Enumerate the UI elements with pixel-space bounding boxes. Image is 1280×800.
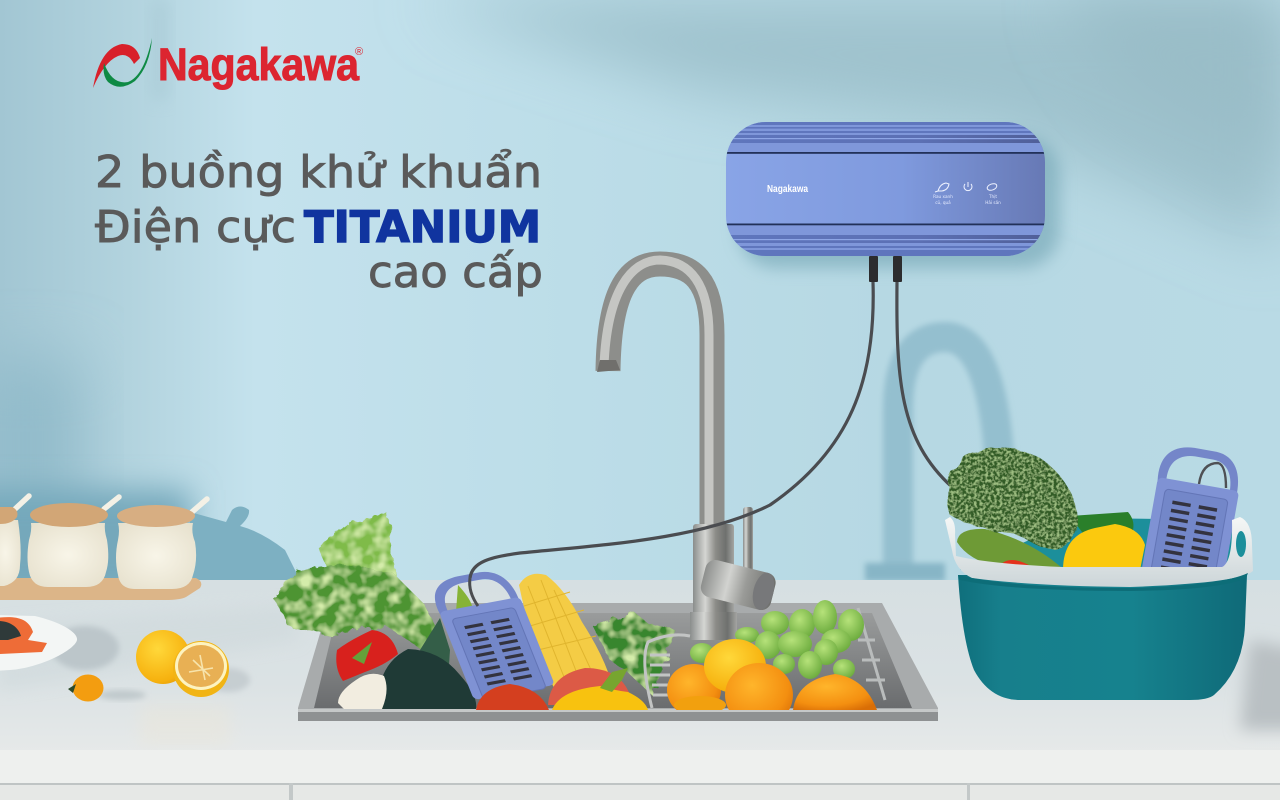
bowl back wall [960,518,1250,570]
headline line 3: cao cấp [368,247,543,298]
jar right [116,505,196,589]
icon: power [964,182,972,191]
vegetables in sink [275,514,885,727]
grater in sink [434,572,554,700]
headline line 1: 2 buồng khử khuẩn [95,147,542,198]
small tomato [68,674,146,702]
faucet body [693,524,734,616]
bowl lip [958,573,1248,591]
registered mark: ® [355,46,363,58]
lever [743,507,753,572]
red pepper [336,630,398,681]
button labels: Thịt [988,194,997,199]
cable to sink [470,282,873,578]
red pepper bit [1002,560,1030,566]
headline [95,147,543,298]
device body [726,122,1045,256]
wooden tray [0,578,201,600]
grater cable loop [1199,463,1226,488]
device brand: Nagakawa [767,184,808,195]
cable connectors [869,256,902,282]
mushroom [338,674,387,709]
logo [93,38,363,90]
titanium: TITANIUM [304,202,541,253]
dark leaf [420,618,450,664]
icon: meat [986,182,998,192]
broccoli [947,448,1077,549]
wall shadow of kitchen board [190,506,300,580]
oranges [667,639,877,710]
top fins [726,122,1045,154]
button labels: Hải sản [985,200,1001,205]
greens [592,612,675,695]
jar left [0,507,21,586]
jar middle [28,503,108,587]
green pepper [1078,512,1134,532]
lemons [136,630,250,697]
faucet neck [608,264,712,540]
faucet shadow on wall [865,337,1000,580]
yellow stem behind grater [456,585,472,609]
wall background [0,0,1280,600]
grater in bowl [1142,447,1238,567]
counter front edge [0,750,1280,783]
tomato [476,684,549,710]
cable to bowl [897,282,952,487]
bowl contents [947,447,1238,567]
faucet [597,260,778,640]
icon: vegetables [935,183,949,192]
yellow pepper [1063,524,1145,570]
squash [378,649,476,709]
mixer [699,558,778,612]
apple [548,668,630,705]
cabinets [0,783,1280,800]
headline line 2: Điện cực [95,202,296,253]
lettuce [275,514,442,655]
bottom fins [726,224,1045,256]
jars on tray [0,496,207,600]
button labels: củ, quả [935,200,951,205]
rim handle hole [1236,531,1246,557]
device [726,122,1060,282]
plate with papaya [0,615,119,671]
cucumber [957,529,1062,568]
corn [519,574,608,690]
logo wordmark: Nagakawa [158,39,360,90]
sink grater cable end [470,578,478,606]
button labels [933,194,1001,205]
bowl [945,442,1253,700]
button labels: Rau xanh [933,194,953,199]
green grapes [690,600,864,679]
countertop [0,580,1280,752]
device shadow [738,136,1060,268]
logo mark [93,38,152,88]
wire basket [645,635,690,708]
bowl body [958,575,1247,700]
bowl rim [945,517,1253,587]
yellow pepper [552,686,648,710]
sink [298,603,938,721]
spoons [14,496,207,512]
